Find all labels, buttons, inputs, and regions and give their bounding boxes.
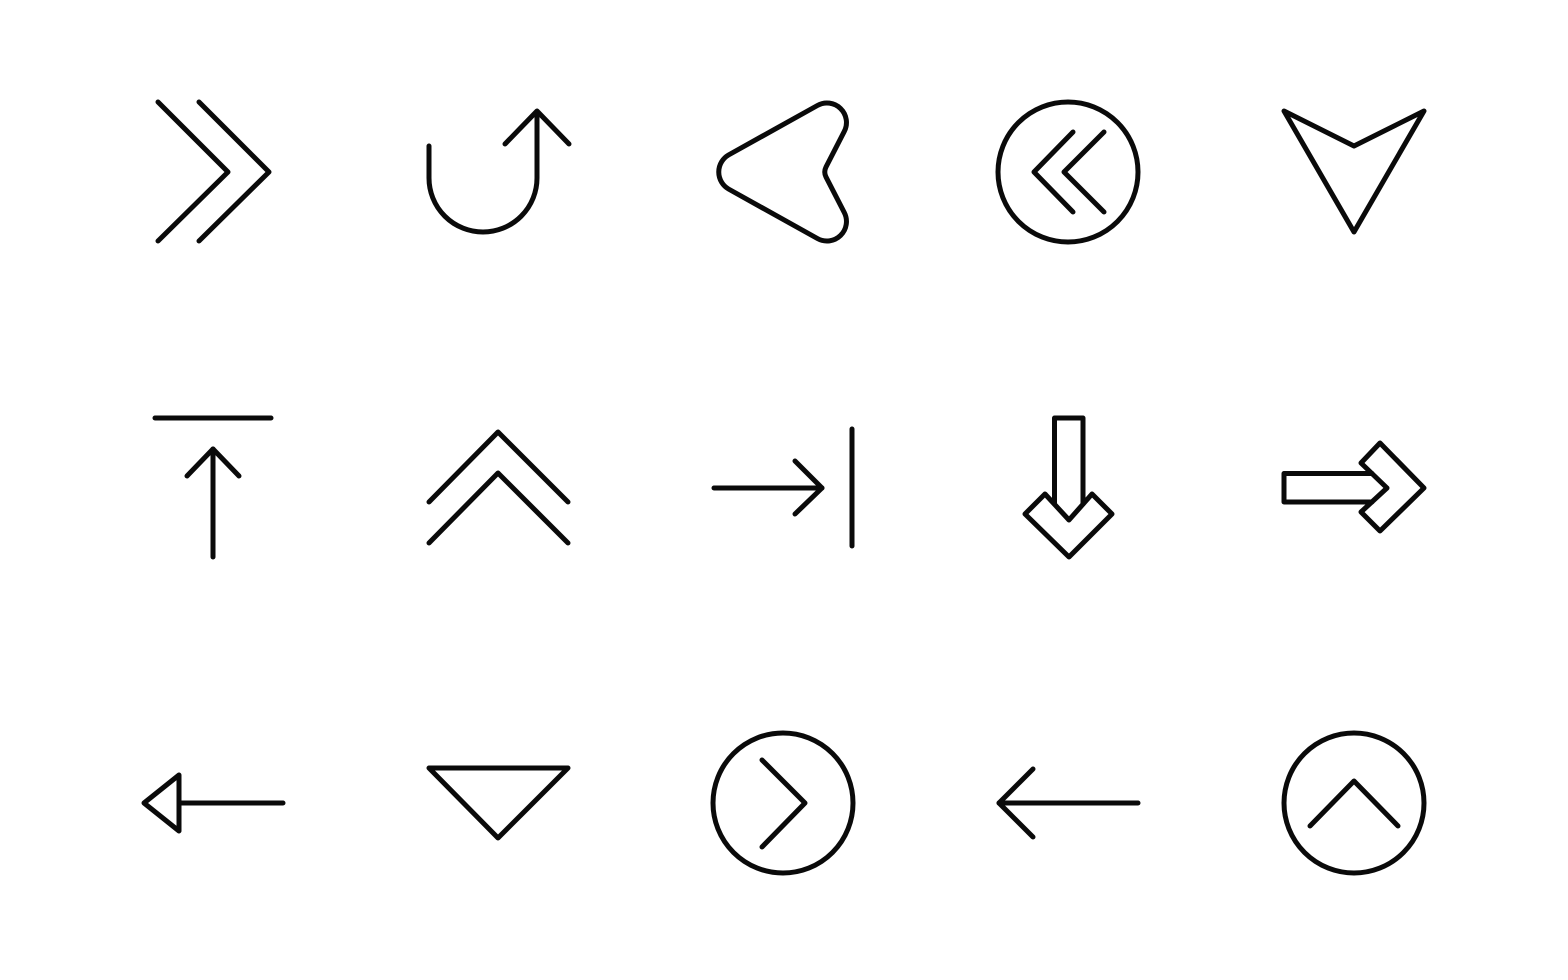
icon: outlined arrow down	[1025, 418, 1112, 557]
icon: outlined arrow right	[1284, 443, 1424, 531]
icon: arrow up to bar	[155, 418, 271, 557]
icon: triangle down	[429, 768, 568, 838]
icon: circled chevron right	[713, 733, 853, 873]
icon: circled double chevron left	[998, 102, 1138, 242]
icon: circled chevron up	[1284, 733, 1424, 873]
icon: rounded navigation arrow left	[719, 103, 846, 241]
icon: double chevron right	[158, 102, 269, 241]
icon: navigation arrow down	[1284, 111, 1424, 232]
icon: arrow right to bar	[714, 429, 852, 546]
icon: arrow left	[999, 769, 1138, 837]
icon: double chevron up	[429, 432, 568, 543]
icon: triangle-head arrow left	[144, 775, 283, 831]
icon: U-turn up arrow	[429, 111, 569, 232]
